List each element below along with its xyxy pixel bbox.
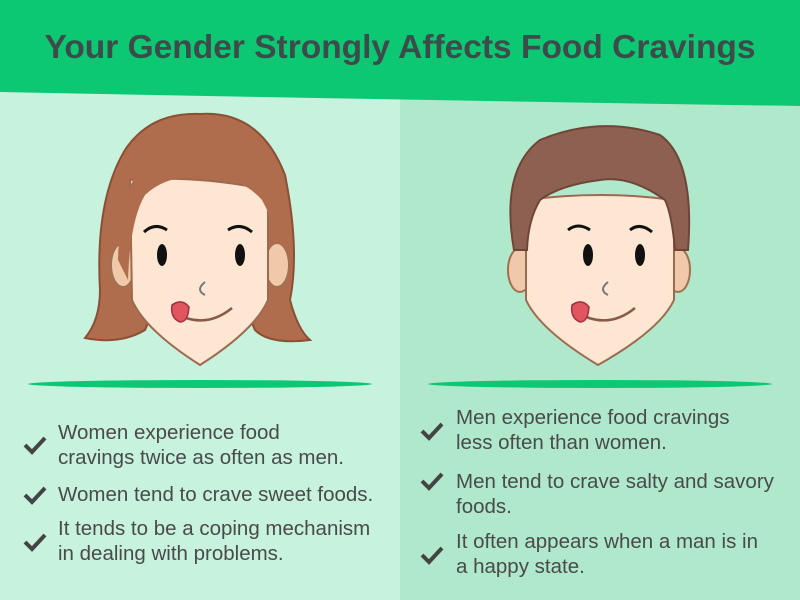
panel: right background xyxy=(400,0,800,600)
icon: woman face xyxy=(83,112,312,366)
text block: women xyxy=(24,421,373,565)
check 1 xyxy=(24,436,46,455)
text block: men: Men experience food cravings xyxy=(456,406,730,429)
check 3 xyxy=(420,546,444,565)
text block: women: It tends to be a coping mechanism xyxy=(58,517,370,540)
text block: men: a happy state. xyxy=(456,555,585,578)
text block: men: It often appears when a man is in xyxy=(456,530,758,553)
text block: men: Men tend to crave salty and savory xyxy=(456,470,774,493)
check 2 xyxy=(420,472,444,491)
check 1 xyxy=(420,422,444,441)
text block: women: Women tend to crave sweet foods. xyxy=(58,483,373,506)
text block: women: in dealing with problems. xyxy=(58,542,284,565)
shadow bars xyxy=(28,380,772,388)
text block: men: foods. xyxy=(456,495,512,518)
check 2 xyxy=(24,486,46,505)
title: Your Gender Strongly Affects Food Cravings xyxy=(44,29,756,66)
check 3 xyxy=(24,534,46,552)
text block: men xyxy=(420,406,774,578)
header banner xyxy=(0,0,800,106)
text block: men: less often than women. xyxy=(456,431,667,454)
text block: women: Women experience food xyxy=(58,421,280,444)
icon: man face xyxy=(507,125,691,366)
text block: women: cravings twice as often as men. xyxy=(58,446,344,469)
